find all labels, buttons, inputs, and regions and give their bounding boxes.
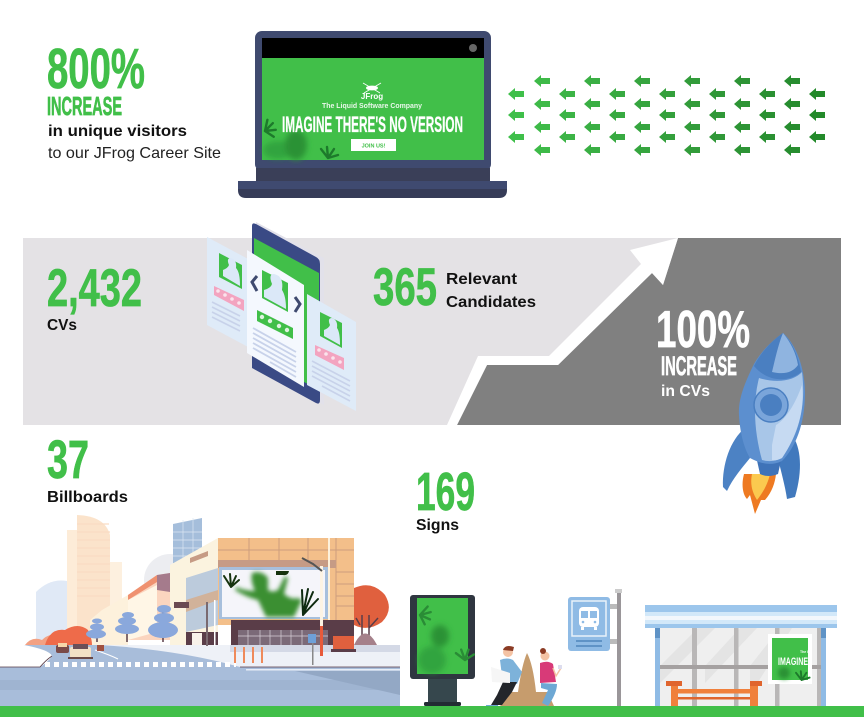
text: to our JFrog Career Site: to our JFrog Career Site <box>48 145 221 162</box>
background towers <box>36 515 202 645</box>
porthole <box>754 388 788 422</box>
illustration: rocket <box>723 333 805 514</box>
stat: 365 relevant candidates: 365 <box>373 258 437 317</box>
nose cone <box>754 333 801 379</box>
stat: 365 relevant candidates <box>373 258 536 317</box>
arrow: white growth line <box>447 238 678 425</box>
laptop screen: JFrog site: IMAGINE THERE'S NO VERSION <box>282 112 463 137</box>
stat: 169 signs: 169 <box>416 462 475 522</box>
shelter poster: IMAGINE <box>778 656 808 668</box>
chevrons <box>252 276 257 291</box>
stat: 100% increase in CVs <box>656 301 750 400</box>
stat: 365 relevant candidates: Candidates <box>446 294 536 311</box>
woman with phone <box>540 648 562 706</box>
motion arrows pointing to the laptop <box>508 75 825 156</box>
bus shelter <box>645 605 837 706</box>
stat: 2,432 CVs: 2,432 <box>47 259 142 318</box>
laptop screen: JFrog site: The Liquid Software Company <box>322 101 423 110</box>
city scene with billboard <box>0 515 400 706</box>
laptop screen: JFrog site <box>261 38 484 160</box>
stat: 37 billboards: 37 <box>47 430 89 490</box>
icon: bus <box>579 607 599 630</box>
bench <box>666 681 762 706</box>
stat: 2,432 CVs <box>47 259 142 334</box>
stat: 169 signs: Signs <box>416 517 459 534</box>
neck <box>756 456 782 476</box>
man reading <box>486 646 522 708</box>
CV card: left <box>207 237 250 348</box>
figure: 800%: 800% <box>47 37 145 101</box>
stat: 365 relevant candidates: Relevant <box>446 271 518 288</box>
CV card: right <box>307 294 356 411</box>
digital billboard sign <box>410 595 475 706</box>
trees <box>86 605 178 642</box>
shelter poster: The L <box>800 650 810 654</box>
street furniture <box>174 558 356 665</box>
shelter roof <box>645 605 837 628</box>
stat: 169 signs <box>416 462 475 534</box>
billboard: frog silhouette <box>219 567 328 619</box>
people on a bench <box>486 646 562 708</box>
stat: 37 billboards <box>47 430 128 506</box>
CV card: centre <box>247 250 304 387</box>
laptop screen: JFrog site: JOIN US! <box>362 144 386 150</box>
JFrog logo: JFrog <box>361 92 383 101</box>
JFrog logo <box>361 83 383 101</box>
right fin <box>778 435 800 499</box>
laptop illustration <box>238 31 507 198</box>
text: in unique visitors: in unique visitors <box>48 123 187 140</box>
stat: 100% increase in CVs: in CVs <box>661 383 710 400</box>
cars <box>56 643 104 659</box>
shelter poster <box>768 634 812 684</box>
stat: 100% increase in CVs: INCREASE <box>661 351 737 381</box>
panel: CV statistics band <box>23 238 841 425</box>
mall <box>170 538 354 648</box>
bushes <box>25 626 92 645</box>
growth area: dark grey <box>457 238 841 425</box>
frog hands <box>224 571 318 615</box>
ground strip <box>0 706 864 717</box>
label: INCREASE: INCREASE <box>47 91 122 121</box>
body <box>739 333 805 464</box>
bus stop sign <box>568 589 622 706</box>
illustration: CVs on a phone <box>207 222 356 411</box>
red tree <box>354 585 389 645</box>
left fin <box>723 428 750 491</box>
road <box>0 645 400 706</box>
flame <box>743 474 776 514</box>
stat: 100% increase in CVs: 100% <box>656 301 750 359</box>
stat: 2,432 CVs: CVs <box>47 317 77 334</box>
stat: 800% increase in unique visitors <box>47 37 221 162</box>
stat: 37 billboards: Billboards <box>47 489 128 506</box>
